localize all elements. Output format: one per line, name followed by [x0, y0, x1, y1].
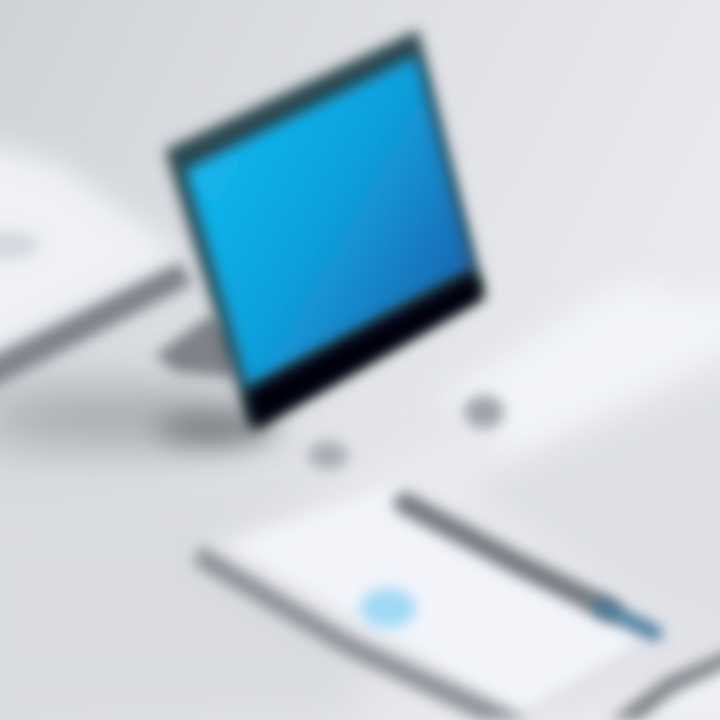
round marks — [464, 395, 504, 429]
corner page — [640, 640, 720, 720]
background lower shading — [0, 490, 360, 720]
tablet bottom bezel — [246, 272, 484, 430]
dark core of shadow — [155, 413, 275, 443]
pen — [405, 503, 655, 633]
paper smudge — [0, 231, 40, 259]
corner page edge — [610, 640, 720, 720]
blue mark on page — [360, 588, 416, 628]
paper edge — [0, 262, 192, 400]
panel: left paper — [0, 135, 192, 400]
lower right page shade — [470, 370, 720, 630]
shadow under tablet — [0, 394, 275, 443]
tablet screen — [186, 56, 472, 388]
tablet frame — [165, 30, 484, 428]
pen tip — [600, 606, 655, 633]
round mark left — [308, 441, 348, 469]
upper page highlight — [440, 285, 720, 450]
notebook edge — [194, 545, 530, 720]
panel: tablet — [165, 30, 484, 430]
tablet stand — [155, 315, 240, 378]
panel: notebook on the right — [194, 285, 720, 720]
white page — [235, 485, 640, 712]
